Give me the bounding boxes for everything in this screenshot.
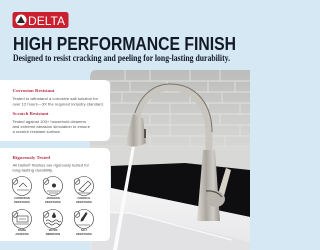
- text: scratch description: a scratch resistant surface.: [12, 130, 61, 134]
- label: RESISTANCE: [76, 233, 92, 236]
- sink basin: [92, 212, 250, 250]
- label: RESISTANCE: [76, 201, 92, 204]
- panel: corrosion and scratch resistance: [0, 80, 110, 141]
- label: ABRASION: [46, 197, 60, 200]
- background: [0, 0, 250, 250]
- spray head: [125, 114, 146, 147]
- sink: [90, 187, 250, 250]
- tile wall: [90, 70, 250, 170]
- text: scratch description: Tested against 100+ household cleaners: [12, 120, 86, 124]
- photo: faucet in kitchen: [90, 70, 250, 250]
- label: FINISH: [18, 229, 26, 232]
- label: SALT: [81, 229, 88, 232]
- icon: salt resistance: [74, 210, 94, 236]
- spray button: [144, 129, 146, 138]
- icon: corrosion resistance: [12, 176, 31, 204]
- icon: water immersion: [43, 210, 62, 236]
- heading: scratch resistant: Scratch Resistant: [12, 111, 49, 116]
- logo: Delta: [12, 12, 68, 28]
- text: scratch description: and extreme abrasion simulation to ensure: [12, 125, 90, 129]
- label: RESISTANCE: [14, 201, 30, 204]
- label: RESISTANCE: [45, 201, 61, 204]
- faucet: [125, 84, 231, 221]
- text: corrosion description: Tested to withstand a corrosive salt solution for: [12, 97, 99, 101]
- text: rigorously tested description: All Delta® finishes are rigorously tested for: [12, 164, 90, 168]
- logo wordmark: DELTA: [28, 16, 65, 28]
- icon: finish adhesion: [12, 210, 31, 236]
- label: CORROSION: [14, 197, 30, 200]
- text: corrosion description: over 12 hours—3X the required industry standard.: [12, 102, 104, 106]
- label: ADHESION: [15, 233, 29, 236]
- panel: rigorously tested: [0, 148, 110, 241]
- faucet neck arc: [136, 87, 209, 155]
- heading: rigorously tested: Rigorously Tested: [12, 155, 50, 160]
- water stream: [113, 146, 135, 250]
- label: IMMERSION: [46, 233, 60, 236]
- black backsplash band: [111, 163, 250, 217]
- handle hub: [207, 191, 225, 207]
- text: rigorously tested description: long-lasting durability.: [12, 168, 53, 172]
- faucet body: [197, 150, 220, 221]
- counter: [90, 147, 250, 173]
- heading: corrosion resistant: Corrosion Resistant: [12, 88, 55, 93]
- icon: abrasion resistance: [43, 176, 62, 204]
- logo mark: [16, 14, 26, 26]
- label: WATER: [49, 229, 58, 232]
- icon: chemical resistance: [74, 176, 94, 204]
- lever handle: [218, 168, 231, 196]
- label: CHEMICAL: [77, 197, 91, 200]
